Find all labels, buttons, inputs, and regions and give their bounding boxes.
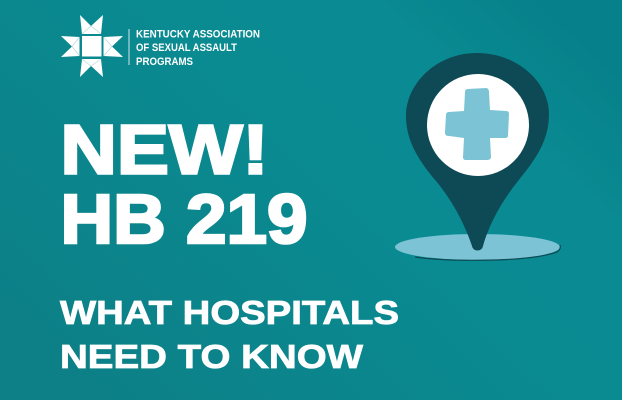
logo: quilt star icon xyxy=(61,15,123,77)
subtitle: WHAT HOSPITALS xyxy=(60,295,399,332)
logo text: OF SEXUAL ASSAULT xyxy=(136,42,237,54)
logo divider xyxy=(128,29,130,65)
pin inner circle xyxy=(427,74,529,176)
logo text: KENTUCKY ASSOCIATION xyxy=(136,28,260,40)
pin body xyxy=(406,53,549,250)
title xyxy=(60,111,308,258)
logo text: PROGRAMS xyxy=(136,56,193,68)
logo text xyxy=(136,28,260,68)
subtitle: NEED TO KNOW xyxy=(60,339,363,376)
title: NEW! xyxy=(60,111,268,189)
pin base ellipse xyxy=(395,234,560,260)
medical cross xyxy=(445,88,509,160)
subtitle xyxy=(60,295,399,376)
icon: map pin with medical cross xyxy=(395,53,560,260)
title: HB 219 xyxy=(60,180,308,258)
